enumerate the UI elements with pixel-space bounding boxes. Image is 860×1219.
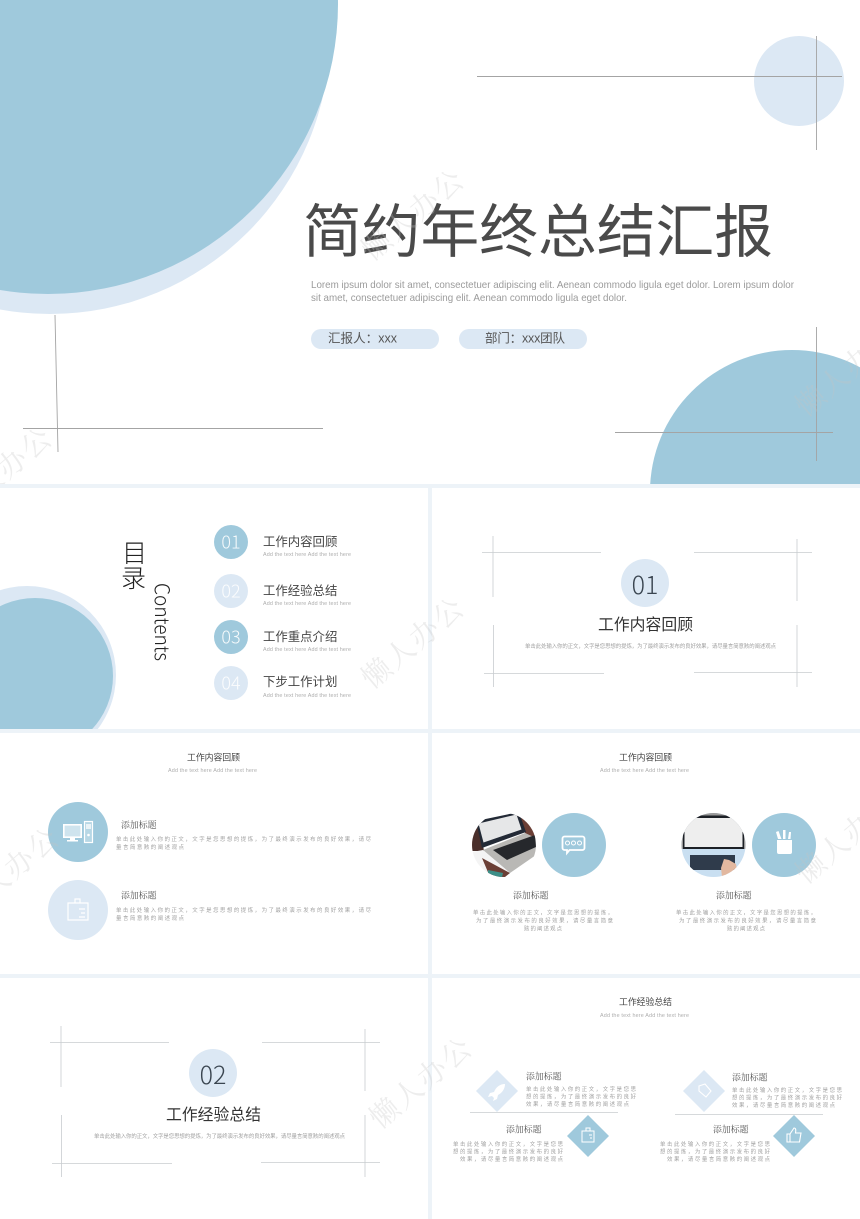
list item 2 text: 单击此处输入你的正文，文字是您思想的提炼，为了最终演示发布的良好效果，请尽	[116, 906, 372, 914]
item 3 text: 想的提炼，为了最终演示发布的良好	[453, 1148, 564, 1156]
card 1 text: 为了最终演示发布的良好效果，请尽量言简意	[476, 916, 614, 924]
item 2 text: 想的提炼，为了最终演示发布的良好	[732, 1094, 843, 1102]
large blue circle	[0, 0, 338, 294]
card 1 text: 添加标题	[513, 888, 549, 902]
item 2 text: 效果，请尽量言简意赅的阐述观点	[732, 1101, 836, 1109]
panel: cover slide	[0, 0, 860, 484]
item 2 text: 添加标题	[732, 1070, 768, 1084]
item 04: 下步工作计划	[263, 672, 337, 690]
item 02	[214, 574, 351, 608]
item 03: Add the text here Add the text here	[263, 647, 351, 653]
item 02: 工作经验总结	[263, 581, 337, 599]
item 4 text	[660, 1122, 771, 1163]
list item 2 text: 添加标题	[121, 888, 157, 902]
item 04	[214, 666, 351, 700]
panel: icon list slide	[0, 733, 428, 974]
item 4 text: 效果，请尽量言简意赅的阐述观点	[667, 1155, 771, 1163]
item 4 text: 添加标题	[713, 1122, 749, 1136]
decorative light circle	[0, 586, 116, 729]
intro text	[311, 280, 794, 303]
icon: badge	[48, 880, 108, 940]
item 03: 03	[221, 624, 241, 650]
card 2 text: 单击此处输入你的正文，文字是您思想的提炼，	[676, 908, 816, 916]
item 3 text	[453, 1122, 564, 1163]
number badge 01: 01	[632, 566, 658, 602]
item 01: Add the text here Add the text here	[263, 552, 351, 558]
list item 1 text: 添加标题	[121, 818, 157, 831]
item 4 text: 单击此处输入你的正文，文字是您思	[660, 1140, 771, 1148]
item 02: Add the text here Add the text here	[263, 601, 351, 607]
item 1 text: 想的提炼，为了最终演示发布的良好	[526, 1092, 637, 1100]
slide heading	[600, 750, 689, 774]
slide heading: Add the text here Add the text here	[600, 768, 689, 774]
list item 2 text	[116, 888, 372, 922]
item 1 text: 效果，请尽量言简意赅的阐述观点	[526, 1100, 630, 1108]
icon: chat bubble	[542, 813, 606, 877]
slide heading: 工作内容回顾	[187, 750, 240, 764]
card 1 text: 单击此处输入你的正文，文字是您思想的提炼，	[473, 908, 613, 916]
section title: 工作内容回顾	[598, 612, 693, 635]
card 1 text	[473, 888, 614, 932]
item 04: Add the text here Add the text here	[263, 693, 351, 699]
heading: 目录	[122, 542, 145, 590]
card 2 text: 为了最终演示发布的良好效果，请尽量言简意	[679, 916, 817, 924]
large light circle	[0, 96, 323, 314]
heading: 目录: 录	[121, 565, 146, 593]
icon: rocket diamond	[476, 1070, 518, 1112]
icon: tag diamond	[683, 1070, 725, 1112]
item 03	[214, 620, 351, 654]
item 01: 工作内容回顾	[263, 532, 337, 550]
item 02: 02	[221, 578, 241, 604]
icon: pen holder	[752, 813, 816, 877]
small light circle top right	[754, 36, 844, 126]
section title: 工作经验总结	[166, 1102, 261, 1125]
slide heading: Add the text here Add the text here	[168, 768, 257, 774]
card 1 text: 赅的阐述观点	[524, 924, 563, 932]
item 4 text: 想的提炼，为了最终演示发布的良好	[660, 1148, 771, 1156]
decorative blue circle	[0, 598, 113, 729]
section description: 单击此处输入你的正文，文字是您思想的提炼，为了最终演示发布的良好效果，请尽量言简意赅的阐述观点	[525, 642, 777, 650]
panel: contents slide	[0, 488, 428, 729]
intro text: Lorem ipsum dolor sit amet, consectetuer adipiscing elit. Aenean commodo ligula eget dolor. Lorem ipsum dolor	[311, 279, 794, 291]
heading: 目录: 目	[122, 540, 147, 568]
card 2 text: 添加标题	[716, 888, 752, 902]
slide heading: 工作内容回顾	[619, 750, 672, 764]
pill: reporter: 汇报人：xxx	[328, 330, 398, 346]
number badge 01	[621, 559, 669, 607]
list item 1 text: 量言简意赅的阐述观点	[116, 843, 185, 851]
item 04: 04	[221, 670, 241, 696]
panel: section 01 slide	[351, 488, 860, 729]
panel: section 02 slide	[0, 978, 428, 1219]
item 1 text: 单击此处输入你的正文，文字是您思	[526, 1085, 637, 1093]
number badge 02: 02	[200, 1056, 226, 1092]
icon: computer	[48, 802, 108, 862]
item 03: 工作重点介绍	[263, 627, 337, 645]
card 2 text: 赅的阐述观点	[727, 924, 766, 932]
watermark: cover centre: 懒人办公	[351, 158, 473, 269]
number badge 02	[189, 1049, 237, 1097]
list item 2 text: 量言简意赅的阐述观点	[116, 914, 185, 922]
item 01	[214, 525, 351, 559]
item 3 text: 单击此处输入你的正文，文字是您思	[453, 1140, 564, 1148]
panel: diamonds slide	[359, 978, 860, 1219]
item 01: 01	[221, 528, 241, 554]
item 1 text	[526, 1070, 637, 1108]
slide heading	[600, 995, 689, 1019]
item 3 text: 添加标题	[506, 1122, 542, 1136]
section description: 单击此处输入你的正文，文字是您思想的提炼，为了最终演示发布的良好效果，请尽量言简意赅的阐述观点	[94, 1132, 346, 1140]
pill: department	[459, 329, 587, 349]
pill: reporter	[311, 329, 439, 349]
watermark: diamonds: 懒人办公	[359, 1026, 481, 1137]
card 2 text	[676, 888, 817, 932]
slide heading: 工作经验总结	[619, 995, 672, 1008]
icon: badge diamond	[567, 1115, 609, 1157]
intro text: sit amet, consectetuer adipiscing elit. Aenean commodo ligula eget dolor.	[311, 292, 627, 304]
photo: laptop on desk	[472, 812, 536, 877]
photo: hands on laptop	[681, 813, 746, 877]
item 1 text: 添加标题	[526, 1070, 562, 1082]
panel: photo cards slide	[432, 733, 860, 974]
title: 简约年终总结汇报	[303, 185, 773, 269]
watermark: section 01: 懒人办公	[351, 586, 473, 697]
item 2 text: 单击此处输入你的正文，文字是您思	[732, 1086, 843, 1094]
blue circle bottom right	[650, 350, 860, 484]
heading: Contents: Contents	[149, 583, 178, 661]
list item 1 text	[116, 818, 372, 851]
item 3 text: 效果，请尽量言简意赅的阐述观点	[460, 1155, 564, 1163]
slide heading	[168, 750, 257, 774]
slide heading: Add the text here Add the text here	[600, 1013, 689, 1019]
pill: department: 部门：xxx团队	[485, 330, 565, 346]
item 2 text	[732, 1070, 843, 1109]
list item 1 text: 单击此处输入你的正文，文字是您思想的提炼，为了最终演示发布的良好效果，请尽	[116, 835, 372, 843]
icon: thumbs up diamond	[773, 1115, 815, 1157]
